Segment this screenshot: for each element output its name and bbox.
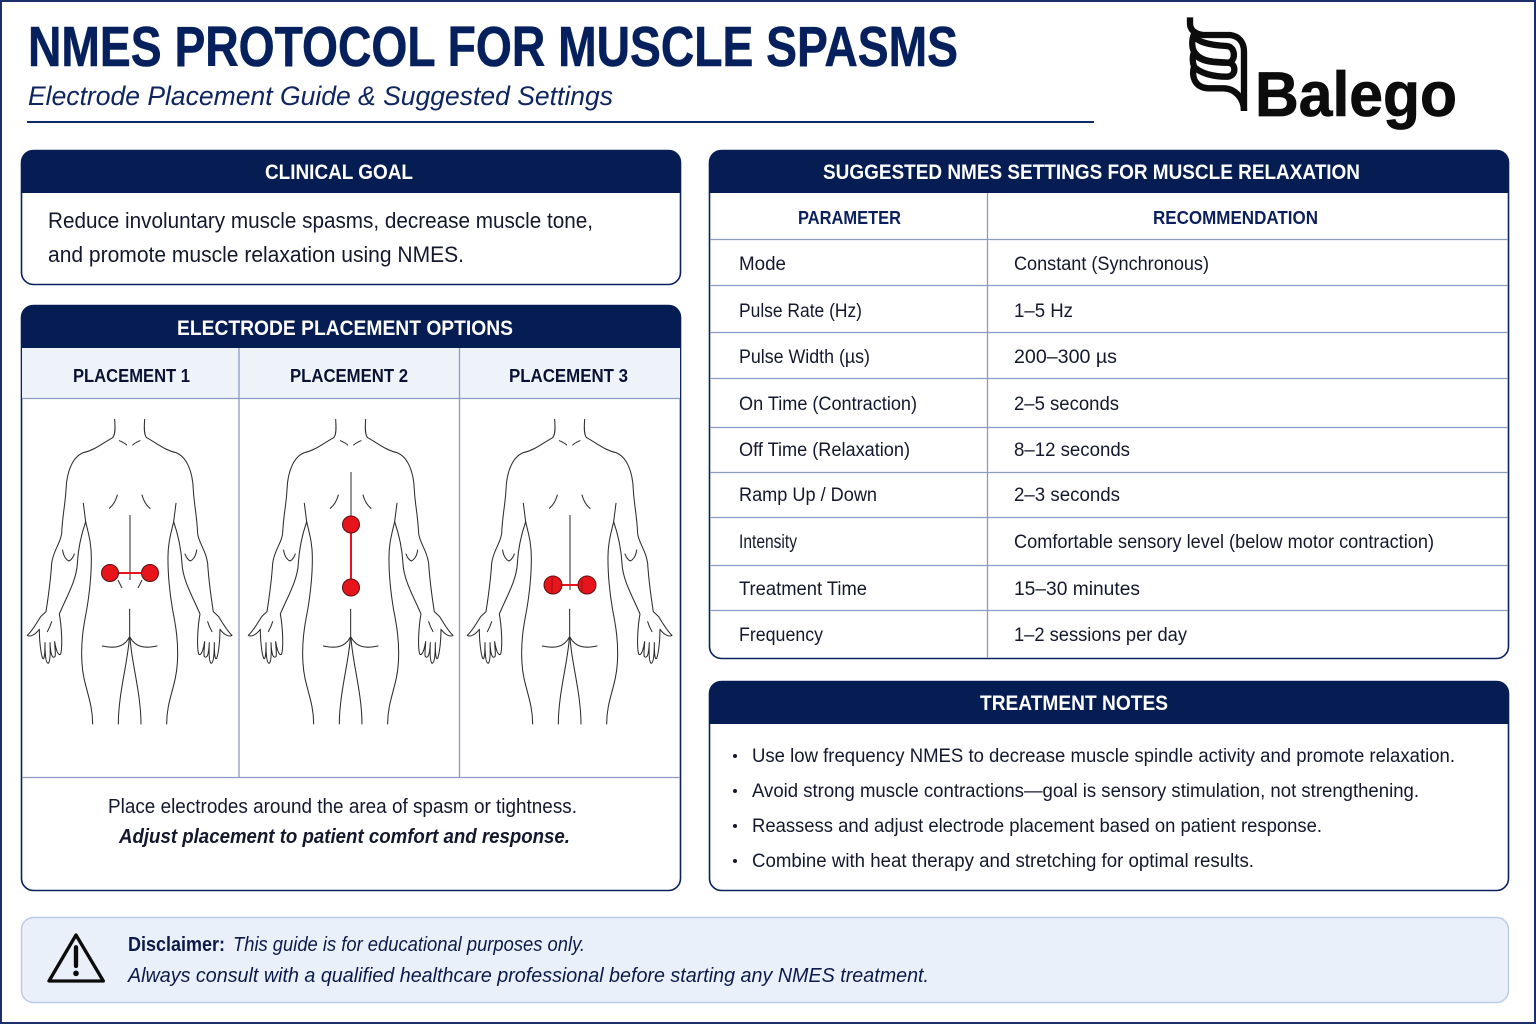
row: frequency <box>739 625 1187 646</box>
treatment notes heading: TREATMENT NOTES <box>980 692 1168 715</box>
title: NMES PROTOCOL FOR MUSCLE SPASMS <box>28 15 958 79</box>
treatment notes header <box>709 681 1509 724</box>
placement 1 label: PLACEMENT 1 <box>73 366 190 386</box>
body diagram: placement 2 <box>248 419 453 724</box>
column header: parameter: PARAMETER <box>798 208 901 228</box>
clinical goal heading: CLINICAL GOAL <box>265 161 413 184</box>
settings header <box>709 150 1509 193</box>
row: treatment time: Treatment Time <box>739 579 867 600</box>
clinical goal text: Reduce involuntary muscle spasms, decrease muscle tone, <box>48 208 593 233</box>
note 3: Reassess and adjust electrode placement based on patient response. <box>752 816 1322 837</box>
logo wordmark: Balego <box>1255 60 1457 130</box>
row: pulse width: Pulse Width (µs) <box>739 347 870 368</box>
disclaimer text: Always consult with a qualified healthcare professional before starting any NMES treatment. <box>127 965 929 987</box>
clinical goal text <box>48 208 593 267</box>
row: frequency: Frequency <box>739 625 823 646</box>
settings heading: SUGGESTED NMES SETTINGS FOR MUSCLE RELAXATION <box>823 161 1360 184</box>
disclaimer text: Disclaimer: <box>128 934 225 956</box>
row: mode: Mode <box>739 254 786 275</box>
body diagram: placement 1 <box>27 419 232 724</box>
note 2: Avoid strong muscle contractions—goal is sensory stimulation, not strengthening. <box>752 781 1419 802</box>
row: intensity <box>739 532 1434 553</box>
disclaimer text: This guide is for educational purposes only. <box>233 934 585 956</box>
subtitle: Electrode Placement Guide & Suggested Settings <box>28 81 613 111</box>
row: off time <box>739 440 1130 461</box>
row: mode <box>739 254 1209 275</box>
row: pulse rate <box>739 301 1073 322</box>
clinical goal text: and promote muscle relaxation using NMES. <box>48 242 464 267</box>
row: ramp up / down <box>739 485 1120 506</box>
disclaimer text <box>127 934 929 987</box>
row: pulse rate: Pulse Rate (Hz) <box>739 301 862 322</box>
row: off time: 8–12 seconds <box>1014 440 1130 461</box>
column header: recommendation: RECOMMENDATION <box>1153 208 1318 228</box>
row: intensity: Intensity <box>739 532 797 553</box>
panel: disclaimer <box>22 918 1508 1002</box>
icon: warning triangle <box>49 935 103 981</box>
body diagram: placement 3 <box>467 419 672 724</box>
placement note <box>108 796 577 848</box>
row: intensity: Comfortable sensory level (below motor contraction) <box>1014 532 1434 553</box>
row: ramp up / down: 2–3 seconds <box>1014 485 1120 506</box>
row: off time: Off Time (Relaxation) <box>739 440 910 461</box>
panel: treatment notes <box>709 681 1509 890</box>
row: treatment time <box>739 579 1140 600</box>
electrode placement heading: ELECTRODE PLACEMENT OPTIONS <box>177 317 513 340</box>
panel: electrode placement options <box>21 305 681 890</box>
row: treatment time: 15–30 minutes <box>1014 579 1140 600</box>
placement 2 label: PLACEMENT 2 <box>290 366 408 386</box>
panel: clinical goal <box>21 150 681 284</box>
row: pulse rate: 1–5 Hz <box>1014 301 1073 322</box>
placement 3 label: PLACEMENT 3 <box>509 366 628 386</box>
header rule <box>27 121 1094 123</box>
icon: logo mark <box>1190 17 1244 111</box>
row: ramp up / down: Ramp Up / Down <box>739 485 877 506</box>
placement sub-header band <box>22 348 680 398</box>
electrodes: placement 3 <box>544 576 596 594</box>
row: on time: On Time (Contraction) <box>739 394 917 415</box>
clinical goal header <box>21 150 681 193</box>
note 4: Combine with heat therapy and stretching for optimal results. <box>752 851 1254 872</box>
row: on time <box>739 394 1119 415</box>
electrode placement header <box>21 305 681 348</box>
row: on time: 2–5 seconds <box>1014 394 1119 415</box>
row: frequency: 1–2 sessions per day <box>1014 625 1187 646</box>
placement note: Adjust placement to patient comfort and response. <box>118 826 570 848</box>
electrodes: placement 1 <box>102 564 158 582</box>
electrodes: placement 2 <box>342 516 360 596</box>
panel: suggested settings table <box>709 150 1509 658</box>
row: pulse width: 200–300 µs <box>1014 347 1117 368</box>
note 1: Use low frequency NMES to decrease muscle spindle activity and promote relaxation. <box>752 746 1455 767</box>
logo: Balego <box>1190 17 1457 130</box>
placement note: Place electrodes around the area of spasm or tightness. <box>108 796 577 818</box>
row: mode: Constant (Synchronous) <box>1014 254 1209 275</box>
row: pulse width <box>739 347 1117 368</box>
